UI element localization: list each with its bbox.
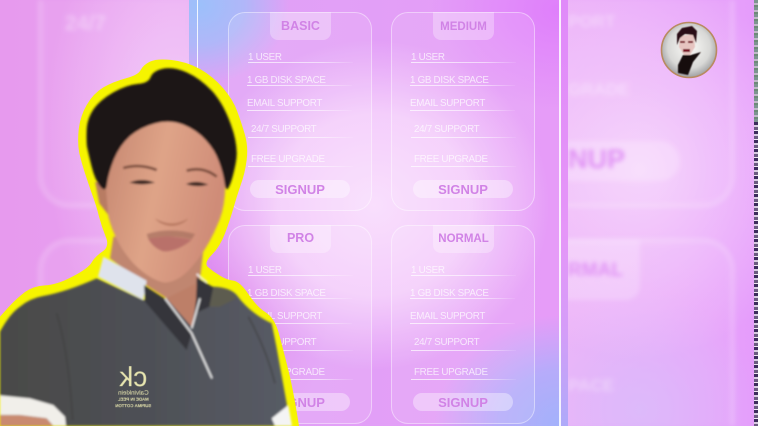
button: signup: SIGNUP [438,182,488,197]
panel: basic plan [228,12,372,211]
button: signup: SIGNUP [275,395,325,410]
avatar features [680,41,693,52]
row: support [411,335,516,351]
row: users [248,50,353,63]
arm skin [0,415,53,426]
row: disk [410,73,515,86]
panel: pricing table [189,0,568,426]
button: signup: SIGNUP [275,182,325,197]
face [106,118,225,283]
ear [95,182,108,215]
row: disk: 1 GB DISK SPACE [410,75,489,86]
moustache [147,230,195,239]
heading: basic: BASIC [281,19,320,33]
row: support: 24/7 SUPPORT [251,124,316,135]
row: upgrade: FREE UPGRADE [251,154,325,165]
neck [110,237,203,327]
row: email: EMAIL SUPPORT [410,98,485,109]
row: users: 1 USER [411,52,445,63]
blurred left card group: 24/7 [65,12,106,35]
blurred right card group: PACE [568,376,614,395]
row: upgrade [411,152,516,167]
dark placket [144,277,213,350]
row: upgrade [248,152,353,167]
row: email [410,96,515,111]
row: upgrade [248,365,353,380]
row: disk [410,286,515,299]
blurred right card group [568,0,736,426]
blurred right card group: GRADE [568,80,629,99]
hair [86,68,237,189]
avatar face [679,34,695,55]
right sleeve cuff [272,405,292,426]
row: disk [247,286,352,299]
row: support: 24/7 SUPPORT [414,124,479,135]
avatar jacket [678,52,701,75]
heading: basic [270,12,331,40]
panel: medium plan [391,12,535,211]
logo tagline: MADE IN PEEL [118,397,149,402]
row: email: EMAIL SUPPORT [247,311,322,322]
heading: normal: NORMAL [438,233,489,245]
heading: normal [433,225,494,253]
row: disk: 1 GB DISK SPACE [410,288,489,299]
left sleeve cuff [0,395,66,426]
row: email [247,96,352,111]
heading: pro: PRO [287,231,314,245]
shoulder seam shade [57,313,275,420]
row: support [411,122,516,138]
row: users [411,263,516,276]
row: support: 24/7 SUPPORT [414,337,479,348]
row: disk: 1 GB DISK SPACE [247,75,326,86]
blurred left card group [38,0,107,286]
heading: medium [433,12,494,40]
row: upgrade [411,365,516,380]
nose [155,218,188,226]
blurred right card group: RMAL [568,260,623,281]
button: signup [250,180,350,198]
figure details [0,68,292,426]
row: upgrade: FREE UPGRADE [251,367,325,378]
button: signup: SIGNUP [438,395,488,410]
row: email: EMAIL SUPPORT [410,311,485,322]
row: email [410,309,515,324]
blurred right card group: NUP [568,144,625,174]
blurred right card group: PORT [568,12,615,31]
row: upgrade: FREE UPGRADE [414,154,488,165]
row: support [248,122,353,138]
row: users: 1 USER [248,52,282,63]
button: signup [413,393,513,411]
icon: round avatar badge [660,22,718,78]
yellow outline [0,59,299,426]
row: disk [247,73,352,86]
avatar hair [677,26,697,45]
piping [165,274,212,378]
white collar [98,257,147,300]
row: users [411,50,516,63]
logo mark: ck [118,361,147,392]
row: users: 1 USER [248,265,282,276]
row: users: 1 USER [411,265,445,276]
row: email: EMAIL SUPPORT [247,98,322,109]
logo fabric: SUPIMA COTTON [115,403,151,408]
panel: pro plan [228,225,372,424]
right shoulder olive patch [209,287,237,307]
eyes [129,180,208,186]
row: support: 24/7 SUPPORT [251,337,316,348]
heading: pro [270,225,331,253]
row: email [247,309,352,324]
row: upgrade: FREE UPGRADE [414,367,488,378]
portrait: man with yellow cutout outline [0,60,299,426]
button: signup [413,180,513,198]
heading: medium: MEDIUM [440,21,487,33]
avatar figure [677,26,701,75]
eyebrows [123,166,217,177]
shirt logo [115,361,151,408]
mouth [148,237,192,251]
neck opening [167,283,197,327]
decorative noise strip top [754,0,758,122]
row: support [248,335,353,351]
button: signup [250,393,350,411]
decorative noise strip at right edge [754,122,758,426]
row: users [248,263,353,276]
brand name: Calvinklein [118,390,149,397]
shirt [0,278,291,426]
panel: normal plan [391,225,535,424]
row: disk: 1 GB DISK SPACE [247,288,326,299]
